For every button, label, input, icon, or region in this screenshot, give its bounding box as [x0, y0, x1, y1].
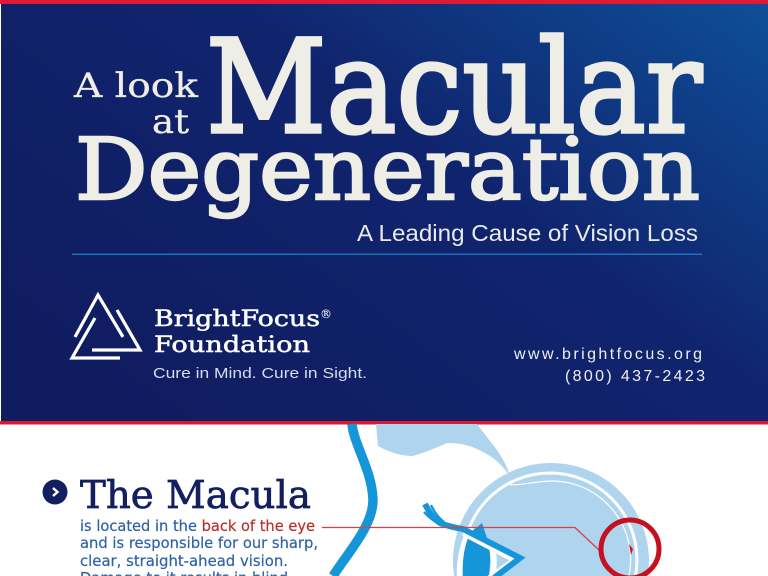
- contact details: [513, 346, 705, 385]
- tagline: Cure in Mind. Cure in Sight.: [153, 365, 367, 382]
- body text: [80, 517, 318, 576]
- body text: is located in the back of the eye: [80, 517, 315, 535]
- head profile outline: [333, 424, 373, 576]
- macula highlight circle: [601, 520, 659, 576]
- eyebrow shape: [376, 424, 510, 476]
- title: [73, 13, 702, 220]
- title: Degeneration: [75, 121, 700, 220]
- callout line to macula: [322, 528, 600, 551]
- eye front with eyelid: [424, 504, 520, 576]
- body text: and is responsible for our sharp,: [80, 534, 318, 552]
- divider line: [72, 254, 702, 255]
- subtitle: A Leading Cause of Vision Loss: [357, 220, 698, 246]
- icon: BrightFocus triangle logo: [72, 295, 140, 358]
- foundation name: BrightFocus: [154, 307, 320, 332]
- foundation name: Foundation: [154, 333, 310, 358]
- header banner: [0, 0, 768, 424]
- contact details: (800) 437-2423: [565, 368, 705, 385]
- heading: The Macula: The Macula: [80, 473, 311, 517]
- foundation name: [154, 307, 332, 358]
- eyeball diagram: [424, 463, 649, 576]
- title: at: [152, 102, 189, 142]
- foundation name: ®: [320, 307, 332, 321]
- icon: bullet chevron: [42, 480, 68, 504]
- contact details: www.brightfocus.org: [513, 346, 702, 363]
- body text: clear, straight-ahead vision.: [80, 552, 288, 570]
- title: Macular: [206, 13, 702, 163]
- title: A look: [73, 66, 198, 106]
